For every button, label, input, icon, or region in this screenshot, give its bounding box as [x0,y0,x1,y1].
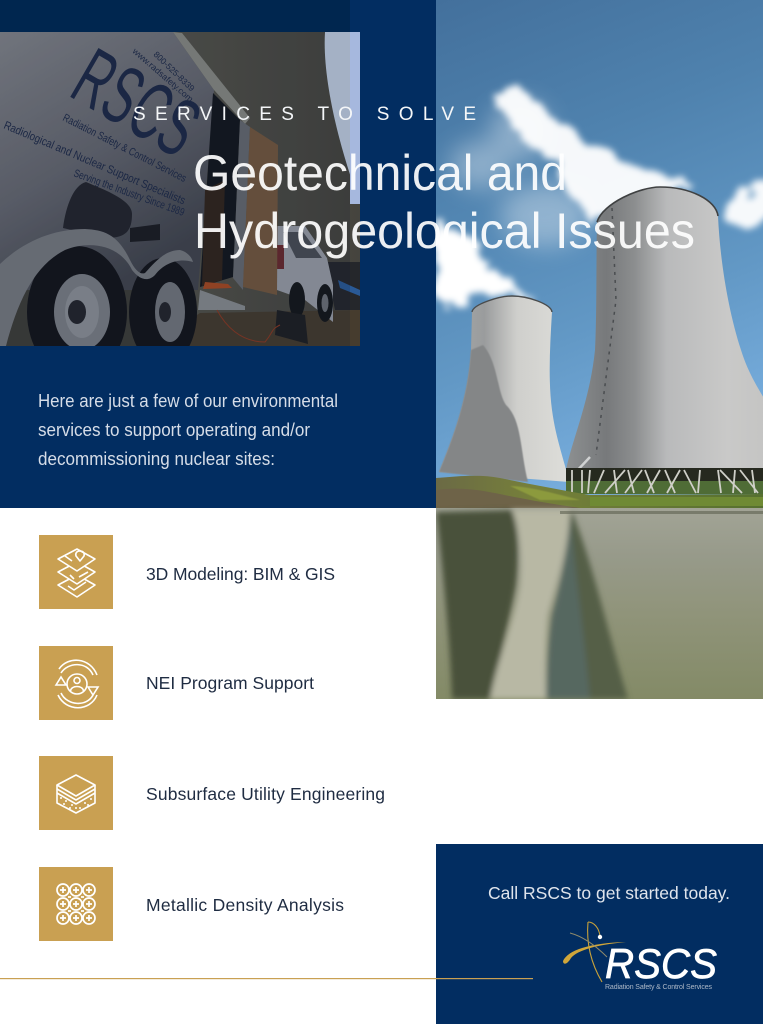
trailer signage [4,48,200,216]
big tower [566,187,763,474]
icon: person in cycle arrows [39,646,113,720]
panel: navy header block [0,0,436,508]
trailer body [0,32,214,290]
bag on fender [63,182,132,238]
trailer signage: www.radsafety.com [130,45,195,104]
pickup truck [277,226,333,322]
label: Subsurface Utility Engineering [146,784,385,804]
panel: call to action [436,844,763,1024]
trailer signage: RSCS [58,32,214,175]
title [193,145,695,259]
eyebrow: services to solve: SERVICES TO SOLVE [133,104,476,125]
intro text: Here are just a few of our environmental [38,391,338,411]
trailer door panel [243,127,278,295]
intro text [38,391,338,469]
photo: RSCS trailer at site [0,32,360,378]
call to action text: Call RSCS to get started today. [488,883,730,903]
trailer signage: 800-525-8339 [152,49,197,93]
clouds [436,85,763,304]
label: 3D Modeling: BIM & GIS [146,564,335,584]
photo dimming overlay [0,32,350,346]
shoreline vegetation [436,476,763,508]
trailer door opening [198,93,250,310]
lake water [436,508,763,700]
icon: soil layers block [39,756,113,830]
intro text: services to support operating and/or [38,420,310,440]
logo: RSCS [563,922,717,991]
service: NEI program support [39,646,314,720]
service: subsurface utility engineering [39,756,385,830]
generator and cord [217,310,308,344]
logo: RSCS: Radiation Safety & Control Services [605,984,712,991]
ground [190,310,360,346]
small tower [439,296,569,482]
background tower and sky [170,32,360,322]
gold divider line [0,978,533,979]
wheels [27,246,197,346]
label: Metallic Density Analysis [146,895,344,915]
diamond plate fender [0,229,193,346]
icon: stacked map layers [39,535,113,609]
intro text: decommissioning nuclear sites: [38,449,275,469]
trailer signage: Serving the Industry Since 1989 [72,168,186,219]
service: 3D modeling [39,535,335,609]
icon: grid of charged circles [39,867,113,941]
tower legs [566,468,763,494]
service: metallic density analysis [39,867,344,941]
title: Hydrogeological Issues [194,203,695,259]
trailer signage: Radiological and Nuclear Support Specialists [2,120,187,207]
photo: cooling towers and lake [436,0,763,700]
title: Geotechnical and [193,145,567,201]
trailer signage: Radiation Safety & Control Services [61,112,188,185]
logo: RSCS: RSCS [605,940,717,987]
label: NEI Program Support [146,673,314,693]
